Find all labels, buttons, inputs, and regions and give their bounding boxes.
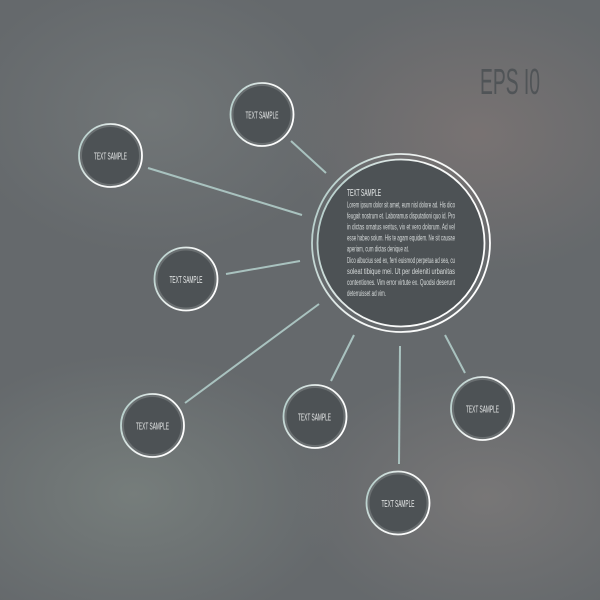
node: lower right: TEXT SAMPLE xyxy=(466,404,499,416)
node: bottom: TEXT SAMPLE xyxy=(382,498,414,510)
node: top: TEXT SAMPLE xyxy=(246,110,278,122)
main circle body text xyxy=(347,200,456,298)
node: lower right xyxy=(451,377,514,440)
main circle body text: Dico albucius sed ex, ferri euismod perpetua ad sea, cu xyxy=(347,256,455,265)
main circle body text: Lorem ipsum dolor sit amet, eum nisl dolore ad. His dico xyxy=(347,200,455,210)
main circle: TEXT SAMPLE xyxy=(347,187,381,199)
main circle body text: aperiam, cum dictas denique at. xyxy=(347,244,409,254)
node: upper left xyxy=(79,124,142,187)
node: lower left: TEXT SAMPLE xyxy=(136,420,169,432)
connector lines xyxy=(148,141,465,464)
node: lower middle xyxy=(284,385,346,448)
node: bottom xyxy=(366,472,430,534)
main circle body text: deterruisset ad vim. xyxy=(347,289,386,298)
node: upper left: TEXT SAMPLE xyxy=(94,150,127,162)
node: lower left xyxy=(121,394,184,457)
main circle body text: in dictas ornatus veritus, vix et vero dolorum. Ad vel xyxy=(347,222,455,232)
main circle body text: contentiones. Vim error virtute ex. Quodsi deserunt xyxy=(347,278,456,287)
heading: EPS 10: EPS I0 xyxy=(480,61,540,102)
node: middle left: TEXT SAMPLE xyxy=(170,274,202,286)
main circle body text: esse habeo solum. His te agam equidem. Ne sit causae xyxy=(347,234,455,242)
main circle body text: feugait nostrum et. Laboramus disputationi quo id. Pro xyxy=(347,212,455,220)
main circle body text: soleat tibique mei. Ut per deleniti urbanitas xyxy=(347,267,455,276)
node: lower middle: TEXT SAMPLE xyxy=(298,412,331,424)
node: top xyxy=(230,83,294,146)
main circle xyxy=(312,154,490,332)
node: middle left xyxy=(154,248,218,310)
